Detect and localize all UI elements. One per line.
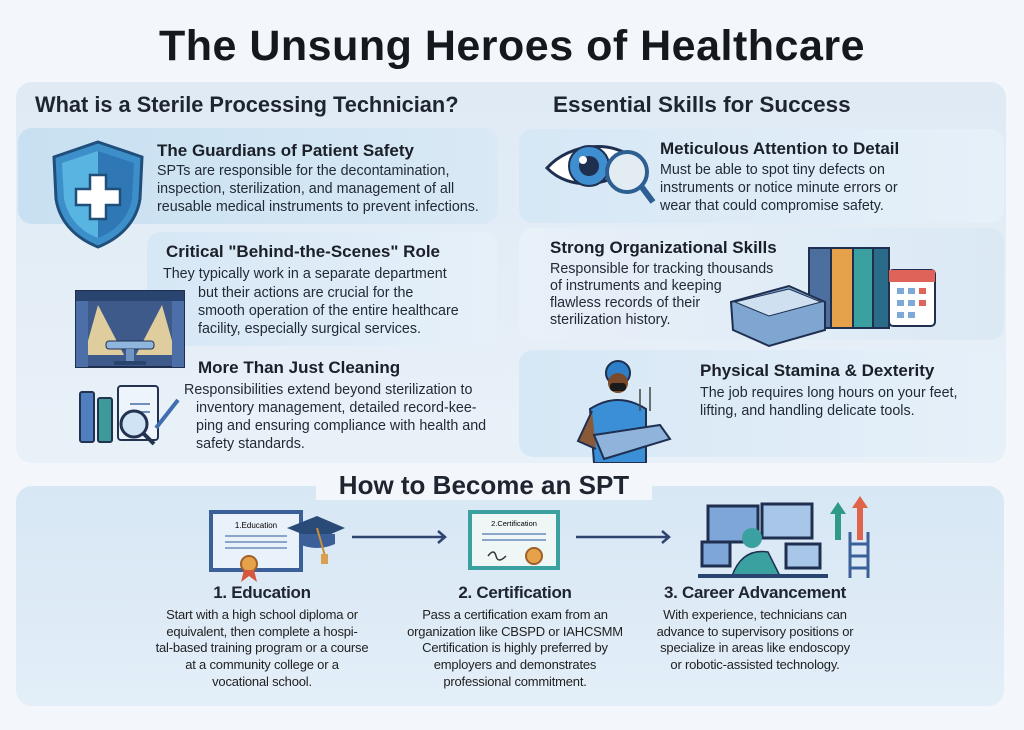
step: certification: Pass a certification exam from an (422, 607, 608, 622)
text: more than cleaning (184, 358, 486, 452)
step: certification: employers and demonstrates (434, 657, 596, 672)
panel: what is an SPT: Responsibilities extend beyond sterilization to (184, 382, 472, 398)
step: certification: Certification is highly preferred by (422, 640, 608, 655)
icon: binders, tray, calendar (730, 247, 936, 347)
panel: what is an SPT: The Guardians of Patient Safety (157, 141, 414, 160)
panel: essential skills: Meticulous Attention to Detail (660, 139, 899, 158)
step: career advancement: advance to supervisory positions or (657, 624, 853, 639)
panel: essential skills: instruments or notice minute errors or (660, 180, 898, 196)
step: education: Start with a high school diploma or (166, 607, 358, 622)
title: The Unsung Heroes of Healthcare (159, 22, 865, 70)
heading: how to become: How to Become an SPT (339, 470, 629, 500)
icon: education diploma and cap: 1.Education (235, 521, 277, 530)
panel: essential skills: sterilization history. (550, 312, 671, 328)
panel: what is an SPT: reusable medical instruments to prevent infections. (157, 199, 479, 215)
panel: essential skills: Strong Organizational Skills (550, 238, 777, 257)
panel: what is an SPT: More Than Just Cleaning (198, 358, 400, 377)
panel: essential skills: The job requires long hours on your feet, (700, 385, 958, 401)
card: guardians (18, 128, 498, 224)
icon: eye with magnifier (545, 145, 656, 204)
icon: binders and docs (79, 385, 180, 446)
step: education: vocational school. (212, 674, 312, 689)
step: career advancement: With experience, technicians can (663, 607, 847, 622)
step: certification: 2. Certification (458, 583, 572, 602)
step: education: 1. Education (213, 583, 311, 602)
panel: what is an SPT: They typically work in a separate department (163, 266, 447, 282)
step: education: equivalent, then complete a hospi- (166, 624, 358, 639)
panel: what is an SPT: inspection, sterilization, and management of all (157, 181, 454, 197)
text: guardians (157, 141, 479, 215)
panel: what is an SPT: safety standards. (196, 436, 305, 452)
icon: worker with tray (576, 360, 672, 463)
text: stamina (700, 361, 958, 419)
icon: stage (75, 290, 185, 368)
panel: essential skills: Responsible for tracking thousands (550, 261, 773, 277)
heading: skills: Essential Skills for Success (553, 92, 851, 117)
step: certification: professional commitment. (443, 674, 587, 689)
step: education: tal-based training program or a course (156, 640, 368, 655)
text: organizational (550, 238, 777, 328)
step: certification: organization like CBSPD or IAHCSMM (407, 624, 623, 639)
icon: shield (52, 140, 144, 249)
card: stamina (519, 350, 1004, 457)
icon: career workstation (698, 496, 870, 578)
panel: what is an SPT: but their actions are crucial for the (198, 285, 413, 301)
icon: certificate (468, 510, 560, 570)
panel: how to become (16, 486, 1004, 706)
panel: essential skills: wear that could compromise safety. (660, 198, 884, 214)
step: career advancement: 3. Career Advancement (664, 583, 846, 602)
panel: what is an SPT: Critical "Behind-the-Scenes" Role (166, 242, 440, 261)
step: career advancement: or robotic-assisted technology. (670, 657, 840, 672)
panel: essential skills: of instruments and keeping (550, 278, 722, 294)
panel: what is an SPT: ping and ensuring compliance with health and (196, 418, 486, 434)
step: education: at a community college or a (185, 657, 339, 672)
text: behind scenes (163, 242, 459, 337)
panel: what is an SPT: facility, especially surgical services. (198, 321, 421, 337)
panel: what is an SPT: inventory management, detailed record-kee- (196, 400, 477, 416)
heading: what is: What is a Sterile Processing Technician? (35, 92, 459, 117)
step: career advancement: specialize in areas like endoscopy (660, 640, 850, 655)
panel: top background (16, 82, 1006, 463)
panel: essential skills: Must be able to spot tiny defects on (660, 162, 885, 178)
arrow 1 (352, 530, 447, 544)
panel: what is an SPT (18, 92, 498, 452)
step: certification (407, 583, 623, 689)
card: attention (519, 129, 1004, 223)
panel: essential skills: flawless records of their (550, 295, 700, 311)
panel: essential skills (519, 92, 1004, 463)
arrow 2 (576, 530, 671, 544)
step: career advancement (657, 583, 854, 672)
panel: essential skills: lifting, and handling delicate tools. (700, 403, 915, 419)
text: attention (660, 139, 899, 214)
step: education (156, 583, 368, 689)
card: organizational (519, 228, 1004, 340)
panel: essential skills: Physical Stamina & Dexterity (700, 361, 934, 380)
panel: what is an SPT: smooth operation of the entire healthcare (198, 303, 459, 319)
icon: education diploma and cap (209, 510, 345, 582)
panel: what is an SPT: SPTs are responsible for the decontamination, (157, 163, 449, 179)
card: behind scenes (147, 232, 497, 346)
icon: certificate: 2.Certification (491, 519, 537, 528)
